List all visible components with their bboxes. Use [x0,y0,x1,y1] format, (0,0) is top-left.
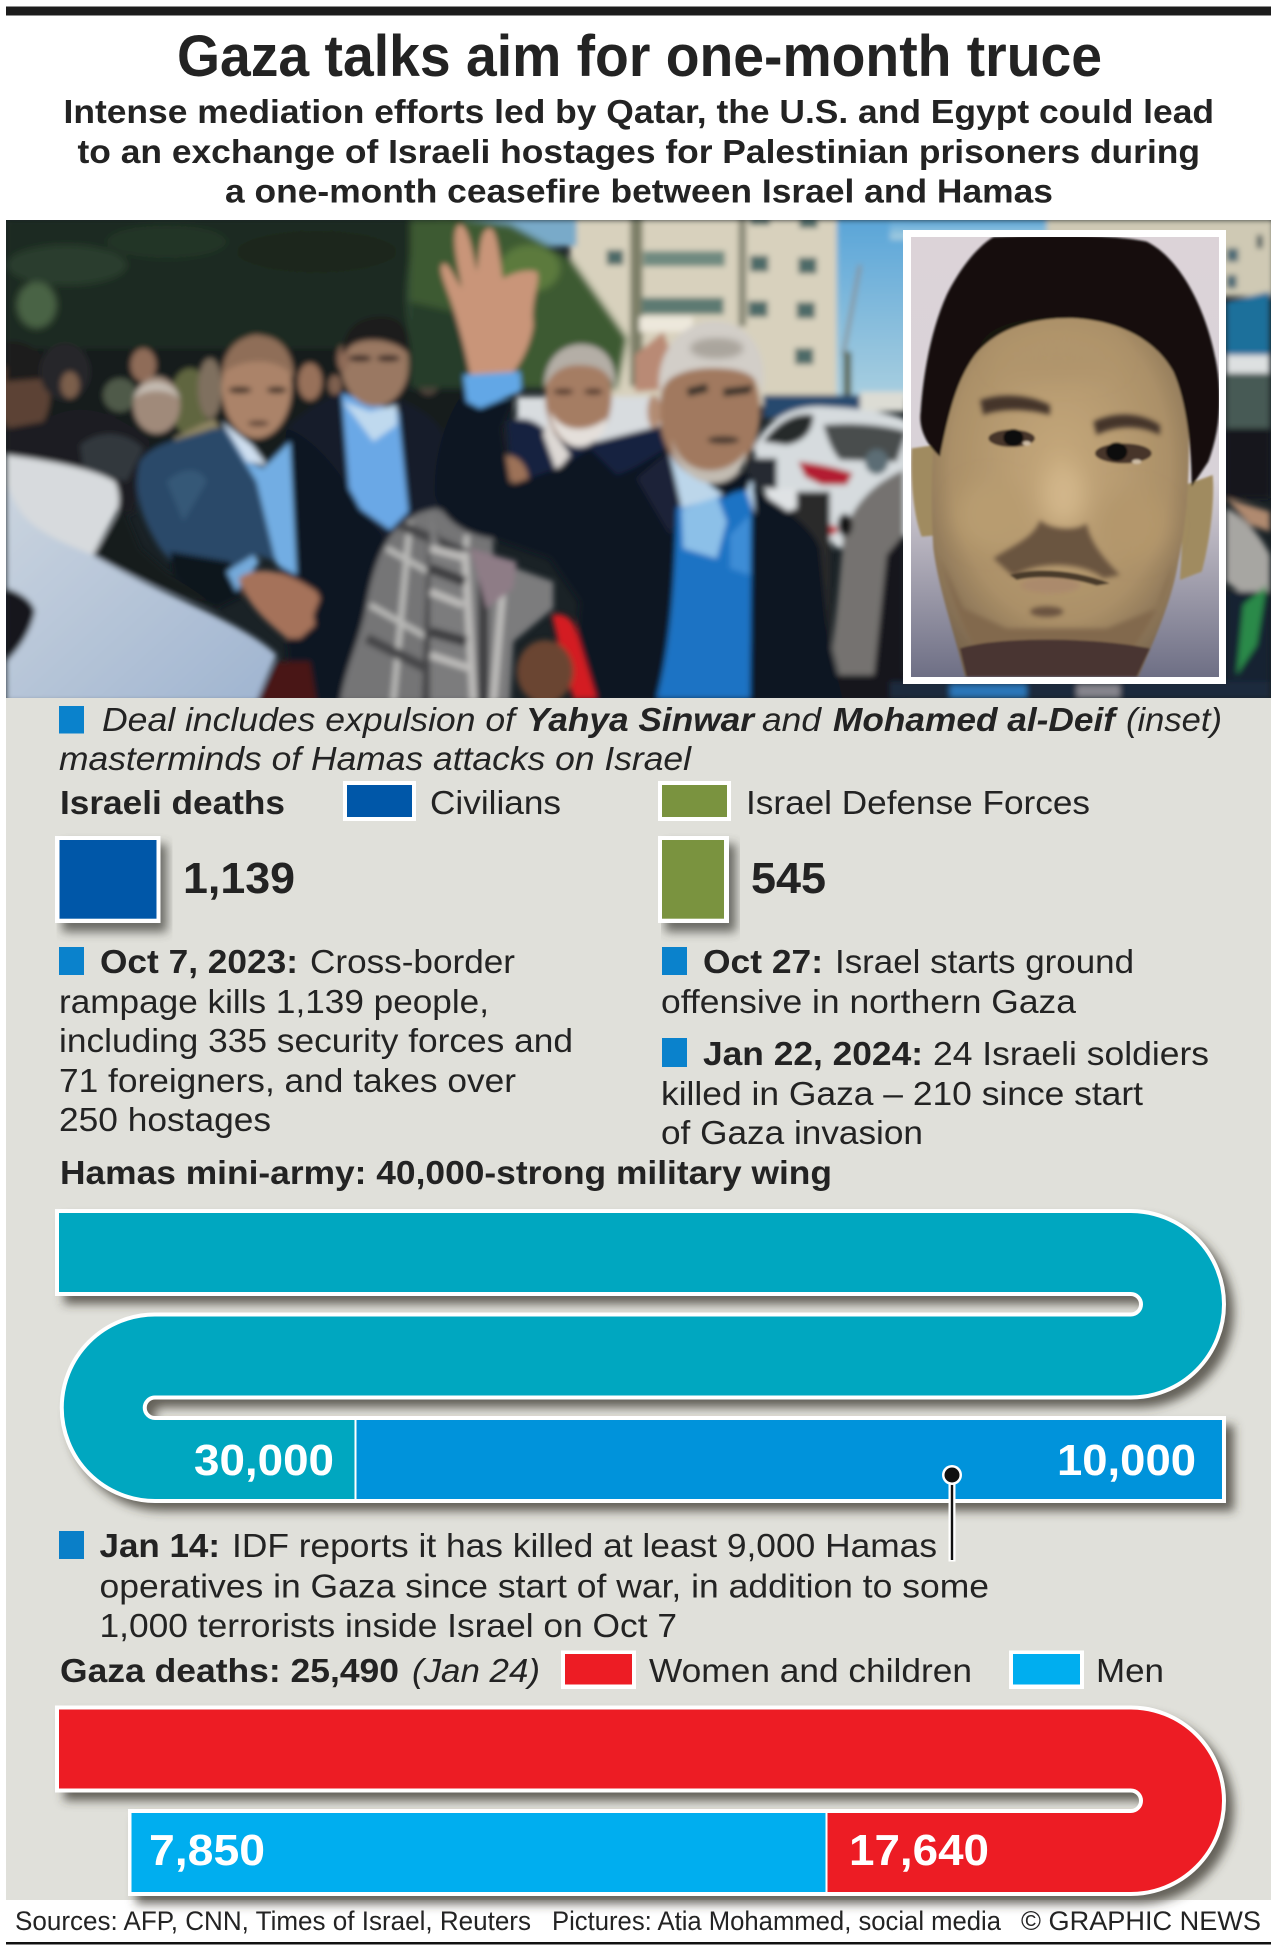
heading: Hamas mini-army: Hamas mini-army: 40,000-strong military wing [60,1155,832,1192]
footer: credits: Pictures: Atia Mohammed, social media [552,1906,1001,1936]
grey suited man [832,470,903,682]
cheek and forehead shading [965,316,1092,534]
panel: grey background [6,698,1271,1900]
chart: civilians square 1,139 [55,836,295,932]
text block: Oct 27: offensive in northern Gaza [661,984,1076,1021]
text block: Jan 22, 2024: of Gaza invasion [661,1115,923,1152]
text block: Oct 7, 2023: rampage kills 1,139 people, [59,984,489,1021]
text block: Jan 22, 2024: Jan 22, 2024: [703,1036,923,1073]
main suit and arm [435,395,843,702]
brows [980,395,1050,415]
shirt [657,490,752,698]
subtitle [64,94,1214,210]
text block: Oct 7, 2023: 250 hostages [59,1102,271,1139]
cars [517,397,663,455]
left men [6,364,54,432]
deal caption: Yahya Sinwar [526,702,756,739]
text block: Jan 14 [59,1528,989,1645]
text block: Oct 7, 2023: 71 foreigners, and takes over [59,1063,516,1100]
scarf [430,508,553,702]
moustache and lips [993,520,1120,578]
text block: Oct 7, 2023 [59,944,573,1139]
text block: Oct 7, 2023: Cross-border [310,944,515,981]
title: Gaza talks aim for one-month truce [177,24,1102,89]
heading: Gaza deaths: (Jan 24) [412,1653,540,1690]
man 2 suit [288,396,444,541]
legend: women and children [561,1650,972,1690]
man behind [502,415,668,480]
text block: Oct 27: Oct 27: [703,944,823,981]
chart: Gaza deaths serpentine bar [55,1749,1191,1875]
footer: credits [15,1906,1261,1936]
legend: Israel Defense Forces [658,781,1090,822]
eyes [988,430,1035,447]
face [932,313,1189,677]
chart: Gaza deaths serpentine bar: 17,640 [849,1826,989,1875]
subtitle: Intense mediation efforts led by Qatar, the U.S. and Egypt could lead [64,94,1214,131]
photo: Yahya Sinwar waving in crowd with inset portrait [0,220,1273,703]
callout marker [942,1465,962,1562]
mouth line [1010,570,1110,586]
beard [960,640,1150,677]
footer: credits: © GRAPHIC NEWS [1021,1906,1261,1936]
hand of guard [238,571,320,638]
text block: Oct 7, 2023: Oct 7, 2023: [100,944,298,981]
chart: Hamas serpentine bar: 10,000 [1057,1436,1196,1485]
deal caption [59,702,1222,778]
chart: Gaza deaths serpentine bar: 7,850 [149,1826,265,1875]
deal caption: and [762,702,822,739]
text block: Jan 14: operatives in Gaza since start of war, in addition to some [100,1568,989,1606]
head of Sinwar [656,365,766,474]
hair [920,235,1220,487]
text block: Jan 22, 2024: 24 Israeli soldiers [933,1036,1209,1073]
subtitle: a one-month ceasefire between Israel and Hamas [225,174,1053,210]
top rule [6,6,1271,16]
text block: Jan 14: Jan 14: [100,1528,220,1565]
text block: Jan 22, 2024 [661,1036,1209,1152]
legend: men [1009,1650,1164,1690]
text block: Oct 7, 2023: including 335 security forces and [59,1023,573,1060]
text block: Jan 14: IDF reports it has killed at least 9,000 Hamas [232,1528,937,1565]
subtitle: to an exchange of Israeli hostages for Palestinian prisoners during [78,134,1200,171]
legend: civilians [343,781,561,822]
chart: Hamas serpentine bar: 30,000 [194,1436,334,1485]
raised hand [441,225,538,382]
ears [911,444,935,538]
heading: Gaza deaths [60,1653,540,1690]
left half scene, zoom coordinates [0,220,496,702]
deal caption: Deal includes expulsion of [102,702,519,739]
heading: Israeli deaths: Israeli deaths [60,785,285,822]
deal caption: masterminds of Hamas attacks on Israel [59,741,693,778]
red flag and child [552,614,597,698]
legend: civilians: Civilians [430,785,561,822]
deal caption: (inset) [1126,702,1222,739]
text block: Jan 22, 2024: killed in Gaza – 210 since start [661,1076,1144,1113]
heading: Gaza deaths: Gaza deaths: 25,490 [60,1653,399,1690]
man 1 suit [137,428,277,588]
chart: IDF square 545: 545 [751,854,826,903]
white car [6,481,282,698]
right strip behind inset, zoom coordinates [890,220,1273,698]
inset portrait: Mohamed al-Deif [903,230,1226,684]
centre scene, zoom coordinates [410,220,910,703]
chart: Hamas serpentine bar [55,1252,1234,1485]
text block: Jan 14: 1,000 terrorists inside Israel on Oct 7 [100,1608,677,1645]
legend: Israel Defense Forces: Israel Defense Forces [746,785,1090,822]
footer: credits: Sources: AFP, CNN, Times of Israel, Reuters [15,1906,531,1936]
chart: IDF square 545 [658,836,826,932]
chart: civilians square 1,139: 1,139 [183,854,295,903]
plaid scarf [340,508,493,702]
legend: women and children: Women and children [649,1653,972,1690]
bottom rule [6,1942,1271,1944]
stubble [950,583,1154,645]
text block: Oct 27 [661,944,1134,1021]
deal caption: Mohamed al-Deif [833,702,1118,739]
legend: men: Men [1096,1653,1164,1690]
text block: Oct 27: Israel starts ground [835,944,1134,981]
